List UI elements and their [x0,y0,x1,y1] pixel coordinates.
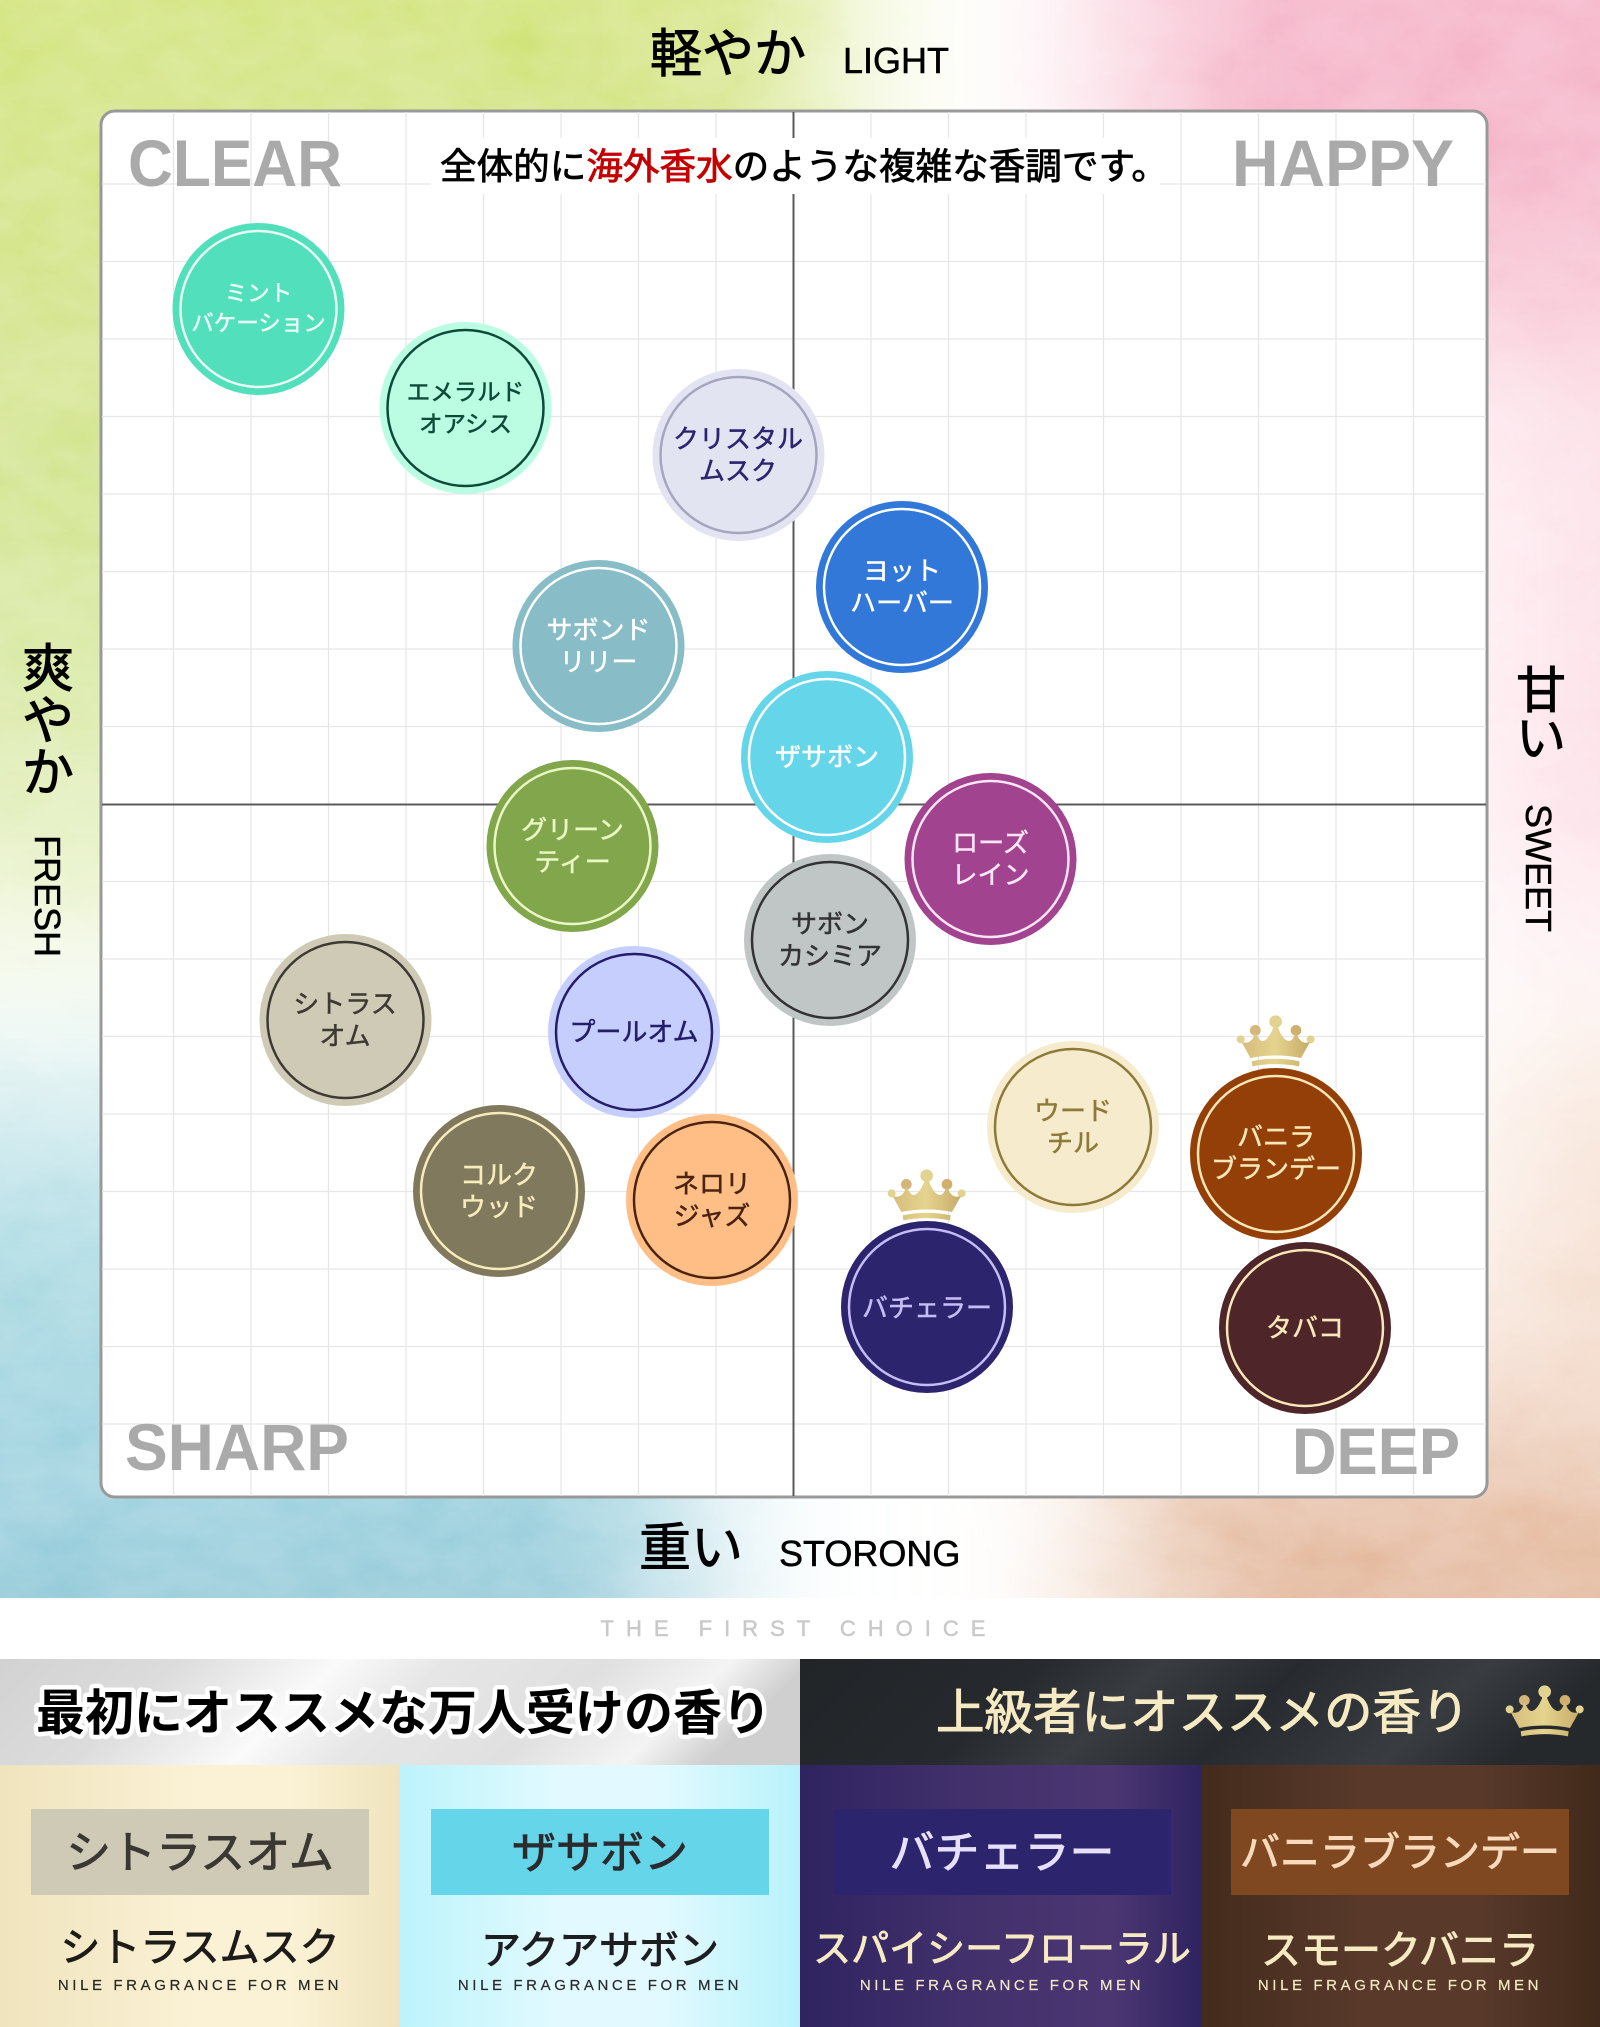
circle: サボンカシミア: カシミア [778,941,882,971]
circle: サボンドリリー [512,560,684,732]
circle: シトラスオム: オム [319,1021,371,1051]
axis label: top light [650,26,949,84]
watercolor background [0,0,1600,1598]
circle: グリーンティー: ティー [534,847,611,877]
axis label: left fresh: や [22,693,74,751]
circle: グリーンティー: グリーン [521,815,624,845]
circle: サボンカシミア: サボン [791,909,869,939]
panel: ザサボン: NILE FRAGRANCE FOR MEN [458,1977,742,1994]
axis label: right sweet: い [1516,711,1566,767]
panel: バチェラー: NILE FRAGRANCE FOR MEN [860,1977,1144,1994]
axis label: bottom strong: STORONG [779,1533,960,1574]
circle: ローズレイン: レイン [951,860,1030,890]
icon: crown on バニラブランデー [1237,1015,1315,1066]
circle: ローズレイン: ローズ [952,828,1029,858]
header: beginner recommendation [0,1659,800,1765]
panel: ザサボン [400,1765,800,2027]
axis label: right sweet [1516,663,1566,932]
panel: バチェラー: スパイシーフローラル [813,1929,1191,1971]
circle: コルクウッド: ウッド [460,1192,538,1222]
axis label: top light: LIGHT [843,40,949,81]
quadrant label: DEEP: DEEP [1292,1414,1460,1488]
axis label: left fresh: FRESH [27,835,68,957]
panel: シトラスオム: NILE FRAGRANCE FOR MEN [58,1977,342,1994]
header: advanced recommendation [800,1659,1600,1765]
circle: ヨットハーバー [816,501,988,673]
circle: エメラルドオアシス: オアシス [419,411,512,437]
axis label: left fresh: か [22,745,74,803]
circle: プールオム [548,946,720,1118]
circle: ザサボン: ザサボン [775,742,879,772]
circle: ザサボン [741,671,913,843]
panel: ザサボン: アクアサボン [481,1929,719,1973]
panel: バニラブランデー: NILE FRAGRANCE FOR MEN [1258,1977,1542,1994]
axis label: right sweet: 甘 [1516,663,1566,719]
circle: クリスタルムスク: ムスク [699,456,777,486]
axis label: right sweet: SWEET [1518,804,1559,932]
circle: ミントバケーション: ミント [225,281,292,306]
circle: ローズレイン [904,773,1076,945]
circle: バチェラー: バチェラー [862,1293,992,1323]
header: beginner recommendation: 最初にオススメな万人受けの香り [36,1687,771,1741]
headline: 全体的に海外香水のような複雑な香調です。 [440,146,1168,187]
circle: プールオム: プールオム [569,1017,699,1047]
panel: バニラブランデー [1201,1765,1600,2027]
section label: THE FIRST CHOICE [601,1616,997,1641]
circle: エメラルドオアシス: エメラルド [407,379,524,405]
panel: シトラスオム [0,1765,400,2027]
circle: タバコ: タバコ [1266,1313,1344,1343]
circle: シトラスオム: シトラス [293,989,397,1019]
panel: positioning map [101,111,1487,1497]
quadrant label: HAPPY: HAPPY [1232,126,1454,200]
circle: タバコ [1219,1242,1391,1414]
quadrant label: SHARP: SHARP [125,1410,349,1484]
circle: クリスタルムスク [652,369,824,541]
circle: ネロリジャズ: ジャズ [674,1201,750,1231]
axis label: bottom strong: 重い [639,1520,743,1578]
circle: コルクウッド [413,1105,585,1277]
circle: ヨットハーバー: ヨット [863,556,941,586]
panel: シトラスオム: シトラスオム [66,1827,334,1878]
quadrant label: CLEAR: CLEAR [128,126,342,200]
circle: コルクウッド: コルク [460,1160,538,1190]
circle: ネロリジャズ [626,1114,798,1286]
axis label: top light: 軽やか [650,26,806,84]
circle: ミントバケーション: バケーション [191,311,326,336]
panel: ザサボン: ザサボン [512,1829,688,1878]
circle: バニラブランデー: バニラ [1237,1122,1315,1152]
circle: ネロリジャズ: ネロリ [673,1169,751,1199]
circle: クリスタルムスク: クリスタル [673,424,803,454]
panel: シトラスオム: シトラスムスク [60,1926,340,1970]
circle: グリーンティー [486,760,658,932]
circle: バニラブランデー: ブランデー [1211,1154,1341,1184]
icon: crown in header [1506,1685,1584,1736]
axis label: left fresh: 爽 [22,641,74,699]
circle: エメラルドオアシス [380,322,552,494]
panel: バチェラー: バチェラー [889,1827,1115,1878]
circle: サボンドリリー: リリー [559,647,638,677]
circle: シトラスオム [260,934,432,1106]
circle: サボンドリリー: サボンド [546,615,651,645]
circle: ミントバケーション [172,223,344,395]
axis label: bottom strong [639,1520,960,1578]
circle: サボンカシミア [744,854,916,1026]
panel: バチェラー [800,1765,1201,2027]
icon: crown on バチェラー [888,1169,966,1220]
circle: ウードチル: チル [1047,1128,1099,1158]
panel: バニラブランデー: バニラブランデー [1240,1831,1560,1875]
panel: バニラブランデー: スモークバニラ [1261,1929,1539,1973]
header: advanced recommendation: 上級者にオススメの香り [936,1686,1470,1740]
circle: ヨットハーバー: ハーバー [850,588,954,618]
circle: ウードチル: ウード [1034,1096,1112,1126]
axis label: left fresh [22,641,74,957]
circle: ウードチル [987,1041,1159,1213]
circle: バチェラー [841,1221,1013,1393]
circle: バニラブランデー [1190,1068,1362,1240]
